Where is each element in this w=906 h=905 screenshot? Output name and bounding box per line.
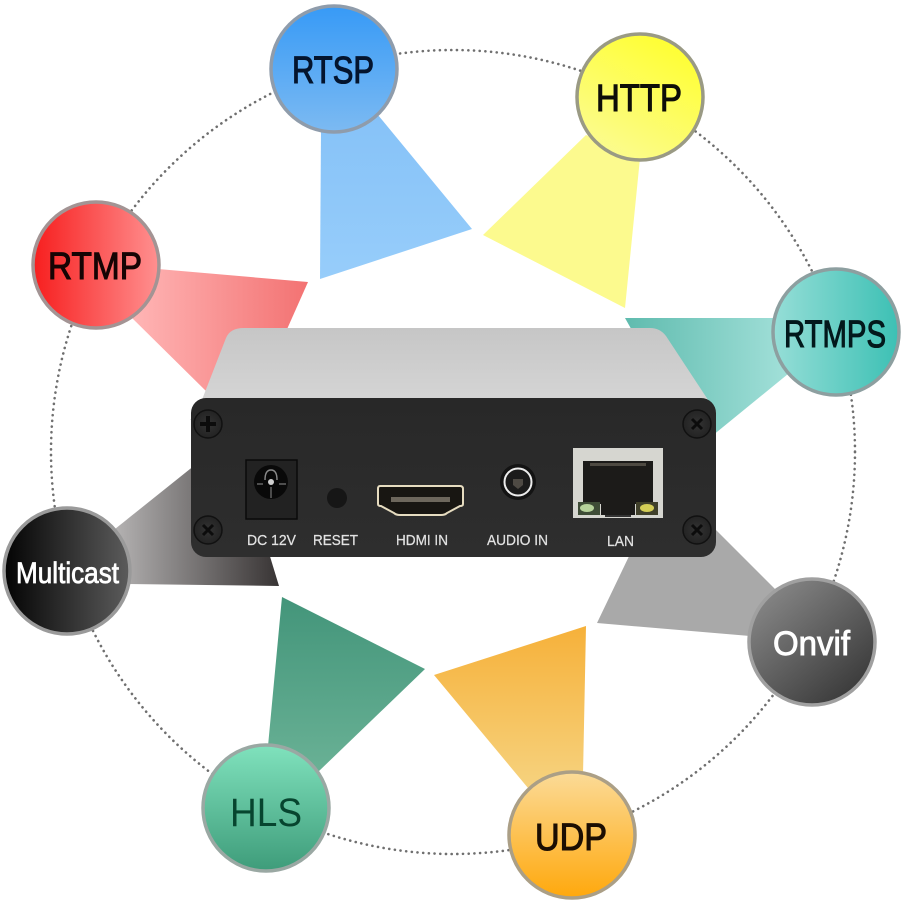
device front plate: [191, 398, 716, 557]
node: HLS: [203, 745, 329, 871]
wedge: HTTP: [483, 135, 640, 308]
node: HLS: HLS: [230, 791, 302, 835]
port: audio jack: [500, 464, 536, 500]
label: DC 12V: DC 12V: [247, 532, 296, 549]
screw: top left: [194, 410, 222, 438]
node: RTMP: [33, 202, 159, 328]
node: Multicast: Multicast: [16, 557, 120, 590]
node: RTMP: RTMP: [48, 246, 142, 288]
label: LAN: LAN: [607, 533, 634, 550]
wedge: RTMPS: [625, 318, 788, 436]
wedge: RTMP: [130, 269, 308, 395]
device: encoder box: [190, 328, 716, 557]
node: RTSP: [271, 6, 397, 132]
wedge: UDP: [434, 626, 586, 788]
port: HDMI: [378, 486, 463, 515]
label: RESET: RESET: [313, 532, 358, 549]
node: UDP: UDP: [535, 817, 607, 859]
node: Onvif: Onvif: [773, 625, 851, 663]
node: Multicast: [4, 508, 130, 634]
dotted ring: [51, 50, 855, 854]
node: UDP: [509, 772, 635, 898]
screw: bottom right: [683, 516, 711, 544]
node: RTMPS: [773, 269, 899, 395]
screw: bottom left: [194, 516, 222, 544]
wedge: HLS: [268, 597, 425, 772]
node: RTSP: RTSP: [292, 50, 374, 92]
port: LAN: [573, 448, 663, 518]
button: reset: [327, 488, 347, 508]
label: HDMI IN: HDMI IN: [396, 532, 448, 549]
node: HTTP: [577, 34, 703, 160]
wedge: RTSP: [320, 115, 472, 279]
label: AUDIO IN: AUDIO IN: [487, 532, 548, 549]
node: HTTP: HTTP: [596, 78, 682, 120]
wedge: Multicast: [115, 465, 279, 586]
screw: top right: [683, 410, 711, 438]
wedge: Onvif: [597, 526, 776, 636]
node: Onvif: [749, 579, 875, 705]
device top face: [190, 328, 716, 420]
port: DC jack: [246, 460, 297, 519]
